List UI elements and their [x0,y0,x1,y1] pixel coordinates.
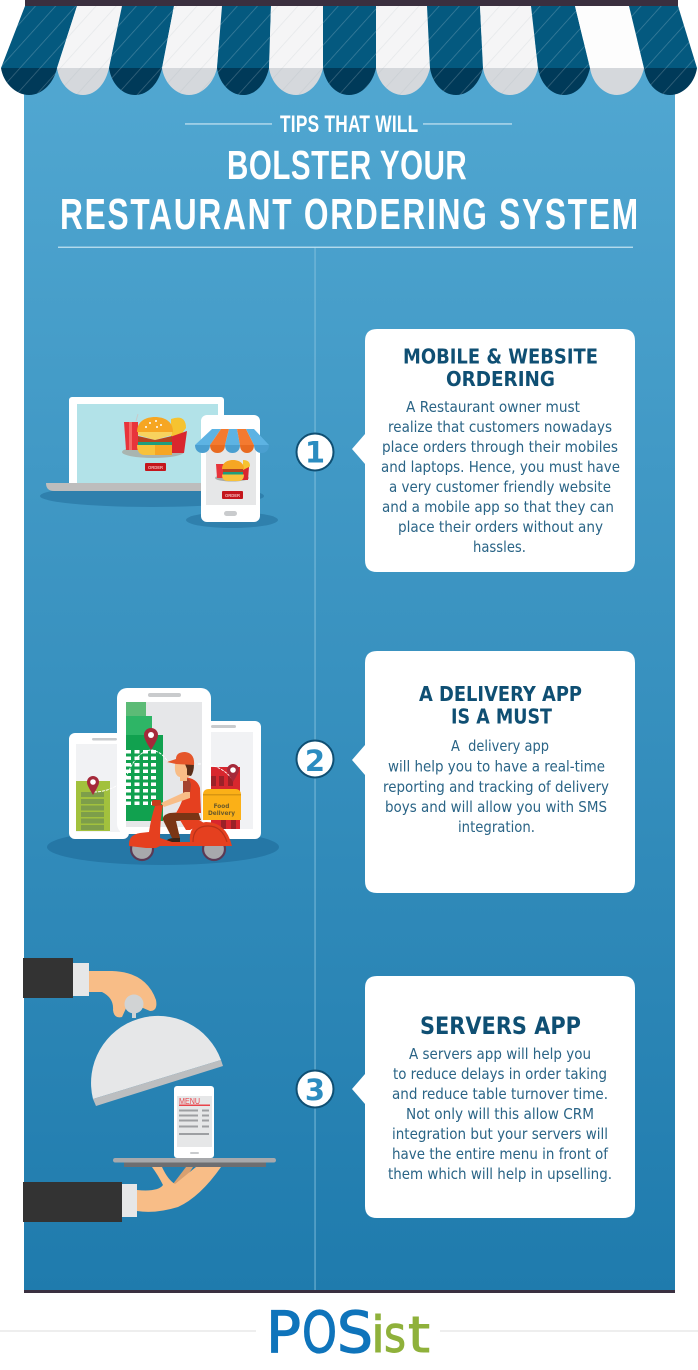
card 1: mobile and website ordering [352,329,635,572]
logo: POSist: O [302,1300,337,1366]
card 2 text: reporting and tracking of delivery [383,779,609,796]
lower sleeve [23,1182,122,1222]
card 1 text: place orders through their mobiles [382,439,618,456]
rider torso [176,777,201,813]
upper cuff [73,963,89,996]
kicker rule right [423,123,512,125]
number badge 2 [296,740,334,778]
card body [352,976,635,1218]
rider head [175,764,192,781]
title line 1: BOLSTER YOUR [227,142,467,188]
laptop [46,397,224,491]
card 3 text: and reduce table turnover time. [392,1086,608,1103]
card 2 heading [419,682,582,728]
tray [113,1158,276,1167]
phone awning [195,429,269,453]
illustration 1: laptop and phone ordering [40,397,278,528]
logo: POSist: P [266,1300,301,1366]
card 2 heading: A DELIVERY APP [419,682,582,706]
scooter body [129,800,232,848]
food delivery box [203,789,241,820]
logo: POSist: t [408,1306,430,1364]
right tablet [200,721,261,839]
card 2 text: integration. [458,819,535,836]
card 3 text: have the entire menu in front of [392,1146,609,1163]
order button on laptop: ORDER [148,465,163,470]
kicker rule left [185,123,272,125]
logo: POSist: s [384,1306,406,1364]
card 1 text: hassles. [473,539,526,556]
card 3 text: A servers app will help you [409,1046,591,1063]
title rule [58,247,633,248]
card 1 text: realize that customers nowadays [388,419,612,436]
logo: POSist: S [337,1300,373,1366]
card body [352,651,635,893]
card 2 text [383,738,609,836]
rider legs [163,811,201,838]
card 1 text: a very customer friendly website [389,479,611,496]
illustration 2: delivery app [47,688,279,865]
card 3 text: to reduce delays in order taking [393,1066,607,1083]
logo: POSist: i [371,1306,385,1364]
card 2 heading: IS A MUST [451,704,552,728]
number badge 1: 1 [305,436,325,470]
food delivery box: Food [214,804,229,810]
card 2 text: will help you to have a real-time [388,758,605,776]
card 3 heading: SERVERS APP [420,1012,581,1040]
card 1 text [381,399,620,556]
food delivery box: Delivery [208,811,235,817]
burger meal on phone [215,460,250,482]
centre phone [117,688,211,834]
card 1 text: place their orders without any [398,519,603,536]
striped awning [1,0,697,95]
number badge 1 [296,434,334,470]
card 2 text: boys and will allow you with SMS [385,799,607,816]
upper hand [89,971,156,1017]
order button on laptop [145,463,166,471]
order button on phone: ORDER [225,493,240,498]
central timeline [314,247,316,1290]
left tablet [69,733,129,839]
menu phone [174,1086,214,1158]
card 3 text: integration but your servers will [392,1126,608,1143]
logo: POSist [266,1300,430,1366]
menu phone: MENU [179,1097,200,1106]
illustration 3: server hands, cloche and menu phone [23,958,276,1222]
card 1 heading: MOBILE & WEBSITE [403,344,598,368]
rider arm [161,792,190,807]
phone with mini awning [195,415,269,522]
footer rule left [0,1330,256,1332]
panel bottom edge [24,1290,675,1293]
order button on phone [222,491,243,499]
upper sleeve [23,958,73,998]
burger meal on laptop [122,414,187,458]
wheels [131,838,225,860]
number badge 2: 2 [305,744,325,778]
footer rule right [440,1330,698,1332]
card 3: servers app [352,976,635,1218]
map pins [87,728,239,795]
title block [58,111,638,248]
lower cuff [122,1184,137,1217]
scooter and rider [129,752,232,860]
card 3 text [388,1046,612,1183]
number badge 3: 3 [305,1073,325,1107]
title line 2: RESTAURANT ORDERING SYSTEM [60,190,638,239]
card 1 text: and a mobile app so that they can [382,499,614,516]
lower hand [137,1167,221,1212]
card 1 heading: ORDERING [446,367,555,391]
card 1 heading [403,344,598,391]
number badge 3 [296,1070,334,1108]
card 1 text: A Restaurant owner must [406,399,580,416]
card 3 text: them which will help in upselling. [388,1166,612,1183]
delivery route [94,750,233,792]
card 2 text: A delivery app [451,738,549,755]
card body [352,329,635,572]
kicker: TIPS THAT WILL [280,111,418,138]
card 1 text: and laptops. Hence, you must have [381,459,620,476]
cloche [91,994,223,1106]
card 3 text: Not only will this allow CRM [406,1106,594,1123]
card 2: a delivery app is a must [352,651,635,893]
